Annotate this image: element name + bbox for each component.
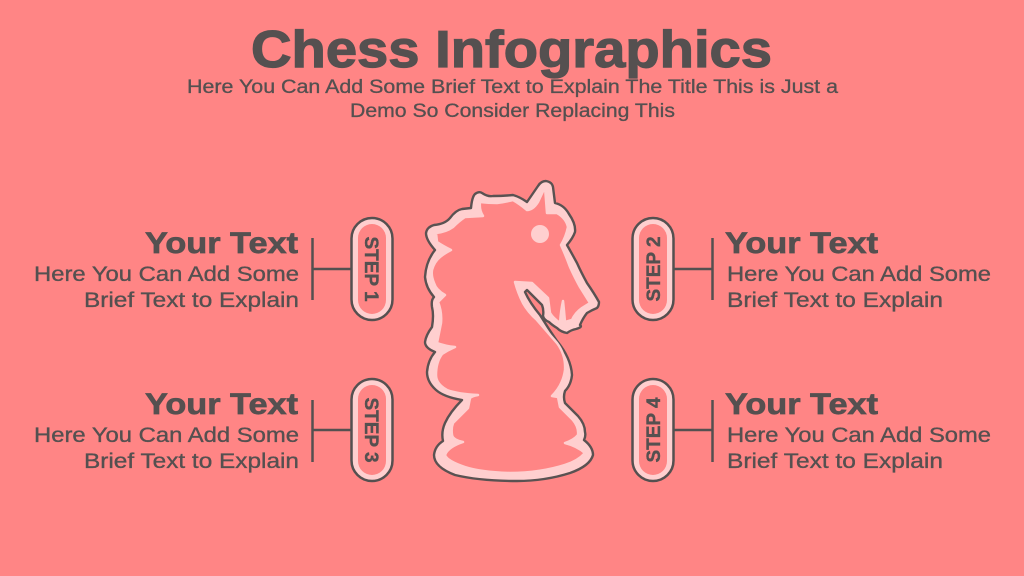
step pill: STEP 1 bbox=[360, 236, 381, 302]
knight eye bbox=[531, 225, 549, 243]
step pill bbox=[352, 218, 392, 320]
step pill: STEP 3 bbox=[360, 398, 381, 462]
text block: Here You Can Add Some bbox=[34, 424, 299, 447]
text block bbox=[727, 424, 991, 473]
subtitle bbox=[187, 77, 838, 122]
text block bbox=[727, 263, 991, 312]
subtitle: Here You Can Add Some Brief Text to Explain The Title This is Just a bbox=[187, 77, 838, 98]
step pill bbox=[632, 379, 674, 481]
text block bbox=[34, 263, 299, 312]
heading: Your Text bbox=[145, 388, 298, 421]
step pill: STEP 2 bbox=[644, 236, 665, 302]
title: Chess Infographics bbox=[251, 21, 772, 79]
connector bbox=[674, 400, 712, 462]
step 2 group bbox=[632, 218, 991, 320]
icon: chess knight bbox=[425, 181, 599, 481]
text block: Brief Text to Explain bbox=[727, 450, 943, 473]
text block: Here You Can Add Some bbox=[34, 263, 299, 286]
step pill: STEP 4 bbox=[644, 397, 665, 462]
text block: Brief Text to Explain bbox=[84, 289, 299, 312]
step pill bbox=[632, 218, 674, 320]
text block: Brief Text to Explain bbox=[84, 450, 299, 473]
step pill bbox=[352, 379, 392, 481]
heading: Your Text bbox=[725, 388, 878, 421]
connector bbox=[674, 238, 712, 300]
step 3 group bbox=[34, 379, 392, 481]
subtitle: Demo So Consider Replacing This bbox=[350, 101, 675, 122]
text block: Brief Text to Explain bbox=[727, 289, 943, 312]
text block: Here You Can Add Some bbox=[727, 263, 991, 286]
connector bbox=[312, 400, 351, 462]
heading: Your Text bbox=[145, 227, 298, 260]
knight inner body bbox=[432, 187, 590, 473]
text block bbox=[34, 424, 299, 473]
step 1 group bbox=[34, 218, 392, 320]
connector bbox=[312, 238, 351, 300]
text block: Here You Can Add Some bbox=[727, 424, 991, 447]
step 4 group bbox=[632, 379, 991, 481]
heading: Your Text bbox=[725, 227, 878, 260]
